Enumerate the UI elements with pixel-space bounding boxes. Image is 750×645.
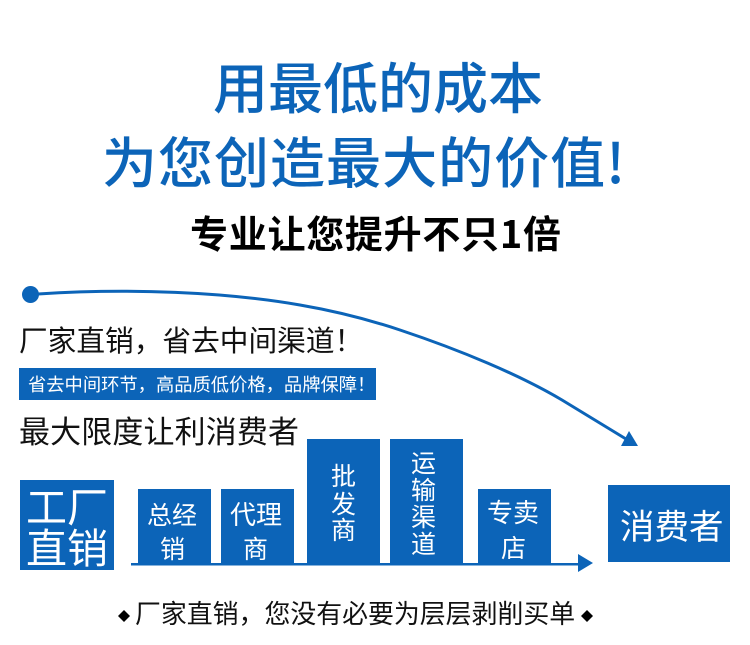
box: wholesaler xyxy=(307,439,380,565)
footer text: 厂家直销，您没有必要为层层剥削买单 xyxy=(135,600,575,629)
box: agent: 商 xyxy=(243,536,268,564)
box: factory direct xyxy=(20,480,114,572)
text: maximum benefit to consumers: 最大限度让利消费者 xyxy=(19,415,299,450)
banner: fewer intermediaries: 省去中间环节，高品质低价格，品牌保障！ xyxy=(28,374,375,395)
text: factory direct: 厂家直销，省去中间渠道！ xyxy=(19,326,363,358)
box: transport channels xyxy=(390,439,463,565)
box: consumer: 消费者 xyxy=(620,509,724,547)
banner: fewer intermediaries xyxy=(19,368,376,400)
box: factory direct: 工厂 xyxy=(26,485,108,531)
subtitle: 专业让您提升不只1倍 xyxy=(190,204,561,259)
box: factory direct: 直销 xyxy=(26,526,108,572)
arrow: curved direct route to consumer xyxy=(22,286,638,446)
box: agent xyxy=(221,489,294,565)
box: specialty store: 店 xyxy=(501,535,526,563)
box: transport channels: 运 xyxy=(411,450,436,478)
title line 1: 用最低的成本 xyxy=(213,44,543,124)
box: specialty store: 专卖 xyxy=(487,498,539,528)
box: transport channels: 道 xyxy=(411,531,436,559)
box: general distributor: 销 xyxy=(160,536,185,564)
box: wholesaler: 发 xyxy=(331,491,356,519)
box: general distributor xyxy=(138,489,211,565)
box: agent: 代理 xyxy=(230,500,282,530)
box: general distributor: 总经 xyxy=(147,502,197,530)
title line 2: 为您创造最大的价值! xyxy=(102,119,625,199)
box: transport channels: 渠 xyxy=(411,504,436,532)
box: wholesaler: 批 xyxy=(331,463,356,491)
box: transport channels: 输 xyxy=(411,477,436,505)
arrow: channel baseline xyxy=(131,554,593,572)
box: consumer xyxy=(608,485,730,562)
box: wholesaler: 商 xyxy=(331,517,356,545)
box: specialty store xyxy=(478,489,551,565)
